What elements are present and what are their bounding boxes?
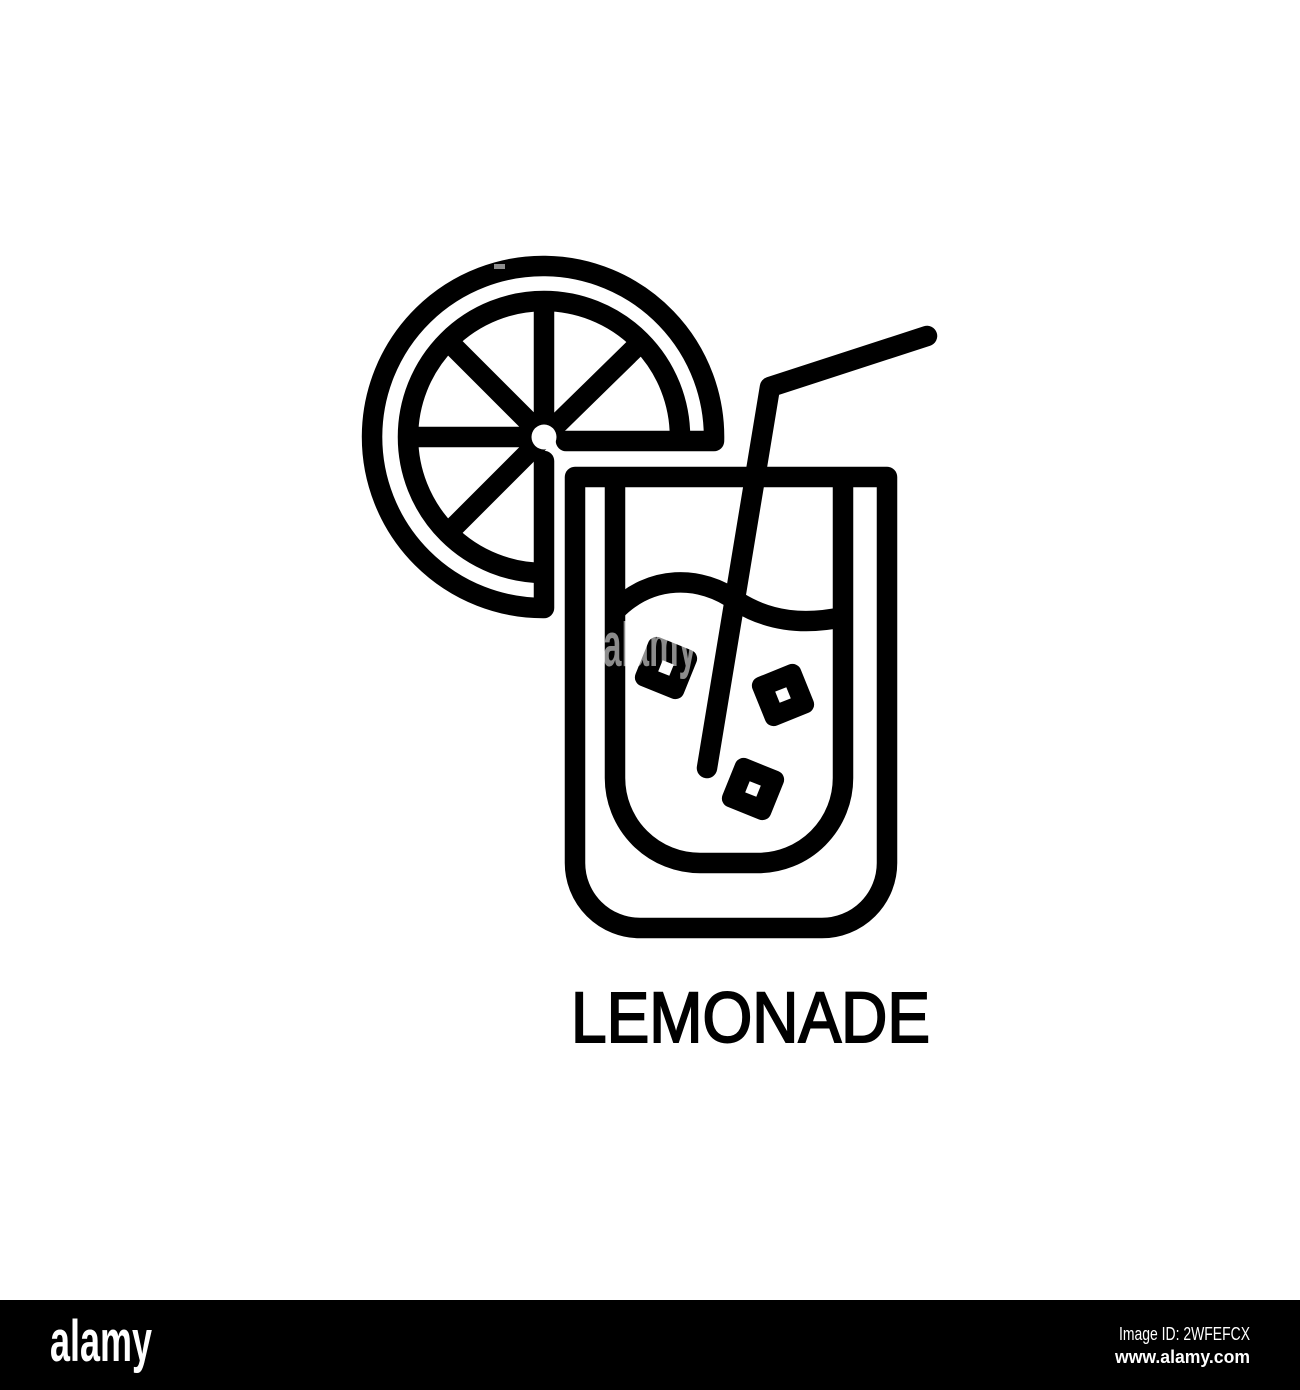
segment spokes: [410, 310, 637, 532]
outer rind: [372, 266, 714, 608]
icon: glass with straw and ice: [575, 336, 927, 928]
icon: lemon slice: [372, 266, 714, 608]
watermark: alamy: [603, 611, 697, 680]
footer logo: alamy: [50, 1309, 152, 1374]
website: www.alamy.com: [1114, 1347, 1250, 1367]
inner rind: [408, 301, 680, 573]
footer bar: [0, 1300, 1300, 1390]
ice cube 1: [632, 634, 700, 702]
ice cube 2: [749, 661, 817, 729]
straw: [707, 336, 927, 768]
label: lemonade: LEMONADE: [571, 979, 930, 1058]
image id: Image ID: 2WFEFCX: [1119, 1324, 1250, 1344]
inner glass: [615, 477, 843, 863]
hub: [532, 424, 556, 450]
glass outline: [575, 477, 887, 928]
watermark speck: [494, 264, 505, 269]
ice cube 3: [719, 755, 787, 823]
liquid surface: [615, 582, 843, 621]
